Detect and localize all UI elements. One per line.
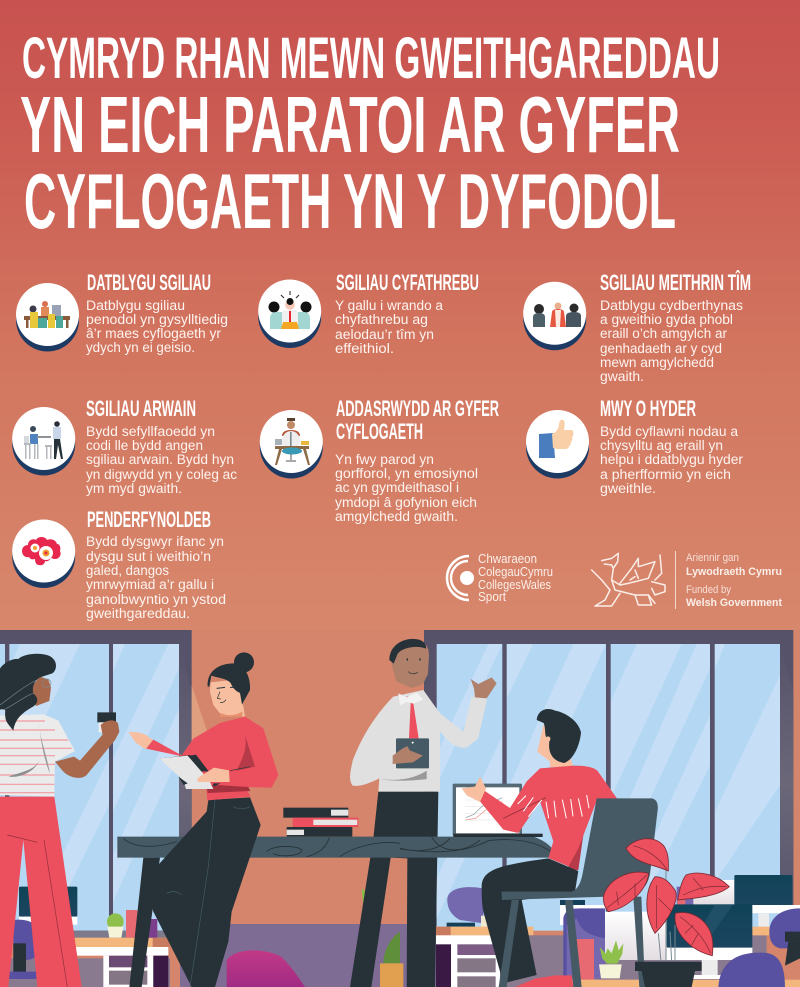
plant with red leaves xyxy=(603,839,729,987)
body text: chyfathrebu ag xyxy=(335,312,428,327)
panel: Sgiliau meithrin tim xyxy=(523,270,751,384)
heading: MWY O HYDER xyxy=(600,396,696,421)
body text: ydych yn ei geisio. xyxy=(86,340,195,355)
body text: aelodau’r tîm yn xyxy=(335,327,434,342)
right window xyxy=(424,630,793,931)
body text xyxy=(86,534,226,621)
body text: chysylltu ag eraill yn xyxy=(600,438,723,453)
body text: sgiliau arwain. Bydd hyn xyxy=(86,452,234,467)
left window xyxy=(0,630,208,938)
stack of books xyxy=(283,808,358,837)
background xyxy=(0,0,800,630)
icon: concentric arcs xyxy=(447,556,474,600)
body text: amgylchedd gwaith. xyxy=(335,509,458,524)
icon: Welsh dragon xyxy=(592,553,665,606)
heading: ADDASRWYDD AR GYFER xyxy=(336,396,499,421)
heading xyxy=(336,396,499,444)
logo text: ColegauCymru xyxy=(478,565,553,579)
body text: yn digwydd yn y coleg ac xyxy=(86,467,237,482)
body text: a pherfformio yn eich xyxy=(600,467,731,482)
body text: ac yn gymdeithasol i xyxy=(335,480,459,495)
body text: Bydd dysgwyr ifanc yn xyxy=(86,534,224,549)
heading: DATBLYGU SGILIAU xyxy=(87,270,211,295)
title xyxy=(20,26,720,245)
body text: dysgu sut i weithio’n xyxy=(86,549,211,564)
body text: Datblygu cydberthynas xyxy=(600,298,743,313)
body text: eraill o’ch amgylch ar xyxy=(600,326,727,341)
logo text: CollegesWales xyxy=(478,578,551,592)
body text: gorfforol, yn emosiynol xyxy=(335,466,478,481)
body text: ym myd gwaith. xyxy=(86,481,182,496)
person: woman with clipboard xyxy=(128,652,278,987)
person: seated man with laptop xyxy=(453,709,658,987)
person: man with tablet xyxy=(350,639,497,987)
illustration: office scene xyxy=(0,630,800,987)
body text xyxy=(600,424,744,496)
panel: Datblygu sgiliau xyxy=(16,270,228,355)
body text: Bydd cyflawni nodau a xyxy=(600,424,738,439)
body text: a gweithio gyda phobl xyxy=(600,312,733,327)
body text: ymrwymiad a’r gallu i xyxy=(86,577,214,592)
desk xyxy=(117,837,554,987)
person: woman with coffee xyxy=(0,654,119,987)
body text: galed, dangos xyxy=(86,563,169,578)
logo text xyxy=(478,552,553,604)
body text: effeithiol. xyxy=(335,341,394,356)
body text: â’r maes cyflogaeth yr xyxy=(86,326,222,341)
panel: Sgiliau arwain xyxy=(12,396,237,496)
logo: Welsh Government xyxy=(592,551,782,609)
icon: group of three xyxy=(523,282,586,350)
background desks left xyxy=(0,887,305,987)
icon: brain with gears xyxy=(12,520,75,588)
body text: penodol yn gysylltiedig xyxy=(86,312,228,327)
body text xyxy=(600,298,743,384)
icon: man at desk xyxy=(260,410,323,478)
heading: PENDERFYNOLDEB xyxy=(87,507,211,532)
body text: gweithle. xyxy=(600,481,656,496)
body text: genhadaeth ar y cyd xyxy=(600,341,722,356)
icon: two people meeting xyxy=(12,407,75,476)
body text xyxy=(86,298,228,355)
body text: Datblygu sgiliau xyxy=(86,298,185,313)
body text: ganolbwyntio yn ystod xyxy=(86,592,226,607)
logo text: Chwaraeon xyxy=(478,552,537,566)
funding text: Ariennir gan xyxy=(686,552,739,564)
body text: helpu i ddatblygu hyder xyxy=(600,452,744,467)
body text: Y gallu i wrando a xyxy=(335,298,443,313)
divider xyxy=(675,551,676,609)
body text: Yn fwy parod yn xyxy=(335,452,434,467)
funding text xyxy=(686,552,782,609)
panel: Addasrwydd ar gyfer cyflogaeth xyxy=(260,396,499,524)
icon: thumbs up xyxy=(526,410,589,478)
funding text: Welsh Government xyxy=(686,597,782,609)
body text: codi lle bydd angen xyxy=(86,438,203,453)
logo: Chwaraeon Colegau Cymru xyxy=(447,552,553,604)
body text xyxy=(335,298,443,356)
logo text: Sport xyxy=(478,590,506,604)
heading: CYFLOGAETH xyxy=(336,419,423,444)
body text: gweithgareddau. xyxy=(86,606,190,621)
icon: team at table xyxy=(16,283,79,352)
plant behind man xyxy=(362,888,403,987)
panel: Penderfynoldeb xyxy=(12,507,226,621)
background desks right xyxy=(436,875,800,987)
wall and floor xyxy=(0,630,800,987)
icon: three people talking xyxy=(258,280,321,348)
panel: Sgiliau cyfathrebu xyxy=(258,270,479,356)
body text xyxy=(86,424,237,496)
heading: SGILIAU CYFATHREBU xyxy=(336,270,479,295)
body text: gwaith. xyxy=(600,369,644,384)
funding text: Lywodraeth Cymru xyxy=(686,566,782,578)
body text xyxy=(335,452,478,524)
panel: Mwy o hyder xyxy=(526,396,744,496)
body text: Bydd sefyllfaoedd yn xyxy=(86,424,215,439)
chair xyxy=(499,798,658,987)
body text: ymdopi â gofynion eich xyxy=(335,495,477,510)
funding text: Funded by xyxy=(686,584,731,596)
heading: SGILIAU ARWAIN xyxy=(86,396,196,421)
body text: mewn amgylchedd xyxy=(600,355,714,370)
laptop xyxy=(453,784,543,837)
